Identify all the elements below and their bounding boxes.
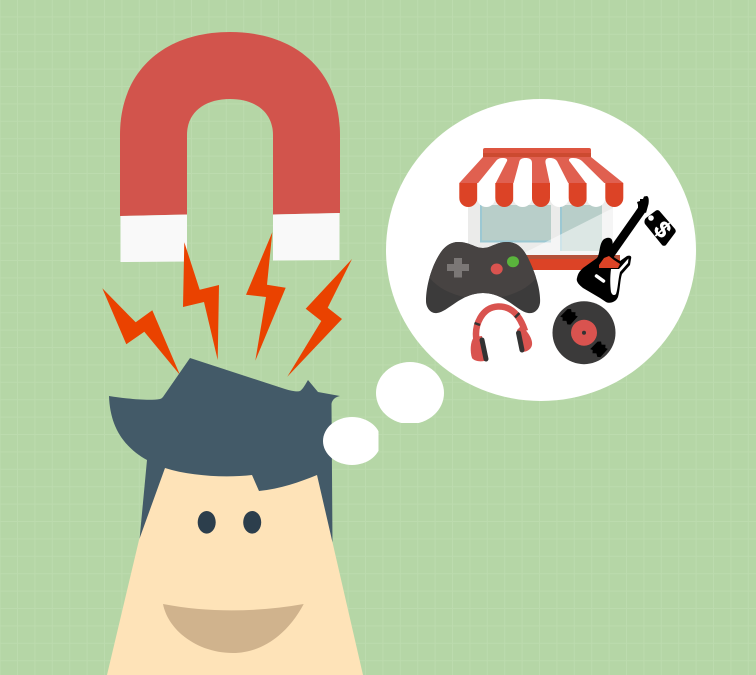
band joint right [515, 313, 520, 318]
bolt 2 [183, 242, 219, 360]
hair [109, 358, 340, 545]
lightning bolts [102, 232, 352, 377]
headband [476, 306, 525, 340]
bolt 1 [102, 288, 180, 375]
shop wall [468, 200, 613, 255]
record disc [552, 301, 616, 364]
awning canopy [459, 157, 623, 183]
guitar with price tag [577, 196, 677, 303]
record hole [582, 331, 586, 335]
headphones [471, 306, 532, 361]
shop icon [459, 148, 623, 270]
bolt 4 [287, 259, 352, 377]
d-pad [447, 258, 469, 278]
shop base [505, 255, 620, 270]
guitar pickguard white [610, 258, 628, 295]
left ear cup [471, 336, 487, 361]
magnet [120, 32, 340, 262]
left speaker bar [482, 340, 486, 359]
mouth [163, 604, 304, 653]
guitar pickup slot [596, 276, 604, 281]
right speaker bar [518, 333, 522, 350]
bolt 3 [246, 232, 286, 361]
record label [571, 320, 597, 346]
guitar body [577, 238, 631, 303]
shop left window [480, 205, 551, 242]
shop wall light reflection [520, 208, 613, 255]
record groove top [559, 307, 579, 326]
awning top bar [483, 148, 591, 158]
vinyl record [552, 301, 616, 364]
shop right window [560, 205, 602, 251]
awning white stripes [477, 158, 605, 184]
magnet left white tip [120, 214, 187, 262]
character head [107, 358, 363, 675]
record groove bottom [589, 339, 609, 359]
guitar headstock [637, 196, 649, 213]
face [107, 468, 363, 675]
magnet right white tip [273, 213, 340, 260]
right eye [243, 511, 261, 534]
green button [507, 256, 519, 267]
awning scallops [459, 183, 623, 207]
band joint left [474, 323, 480, 325]
right ear cup [517, 326, 532, 352]
dollar sign: $ [649, 216, 677, 243]
left eye [198, 511, 216, 534]
game controller [426, 242, 540, 314]
thought bubble small [323, 417, 381, 465]
controller upper highlight [430, 242, 536, 298]
guitar pickguard red [599, 256, 620, 268]
controller lower body [426, 242, 540, 313]
thought bubble medium [376, 362, 444, 424]
guitar neck [610, 208, 643, 255]
magnet red horseshoe [120, 32, 340, 216]
tag hole [648, 215, 654, 221]
thought bubble large [386, 99, 696, 401]
red button [491, 264, 503, 274]
